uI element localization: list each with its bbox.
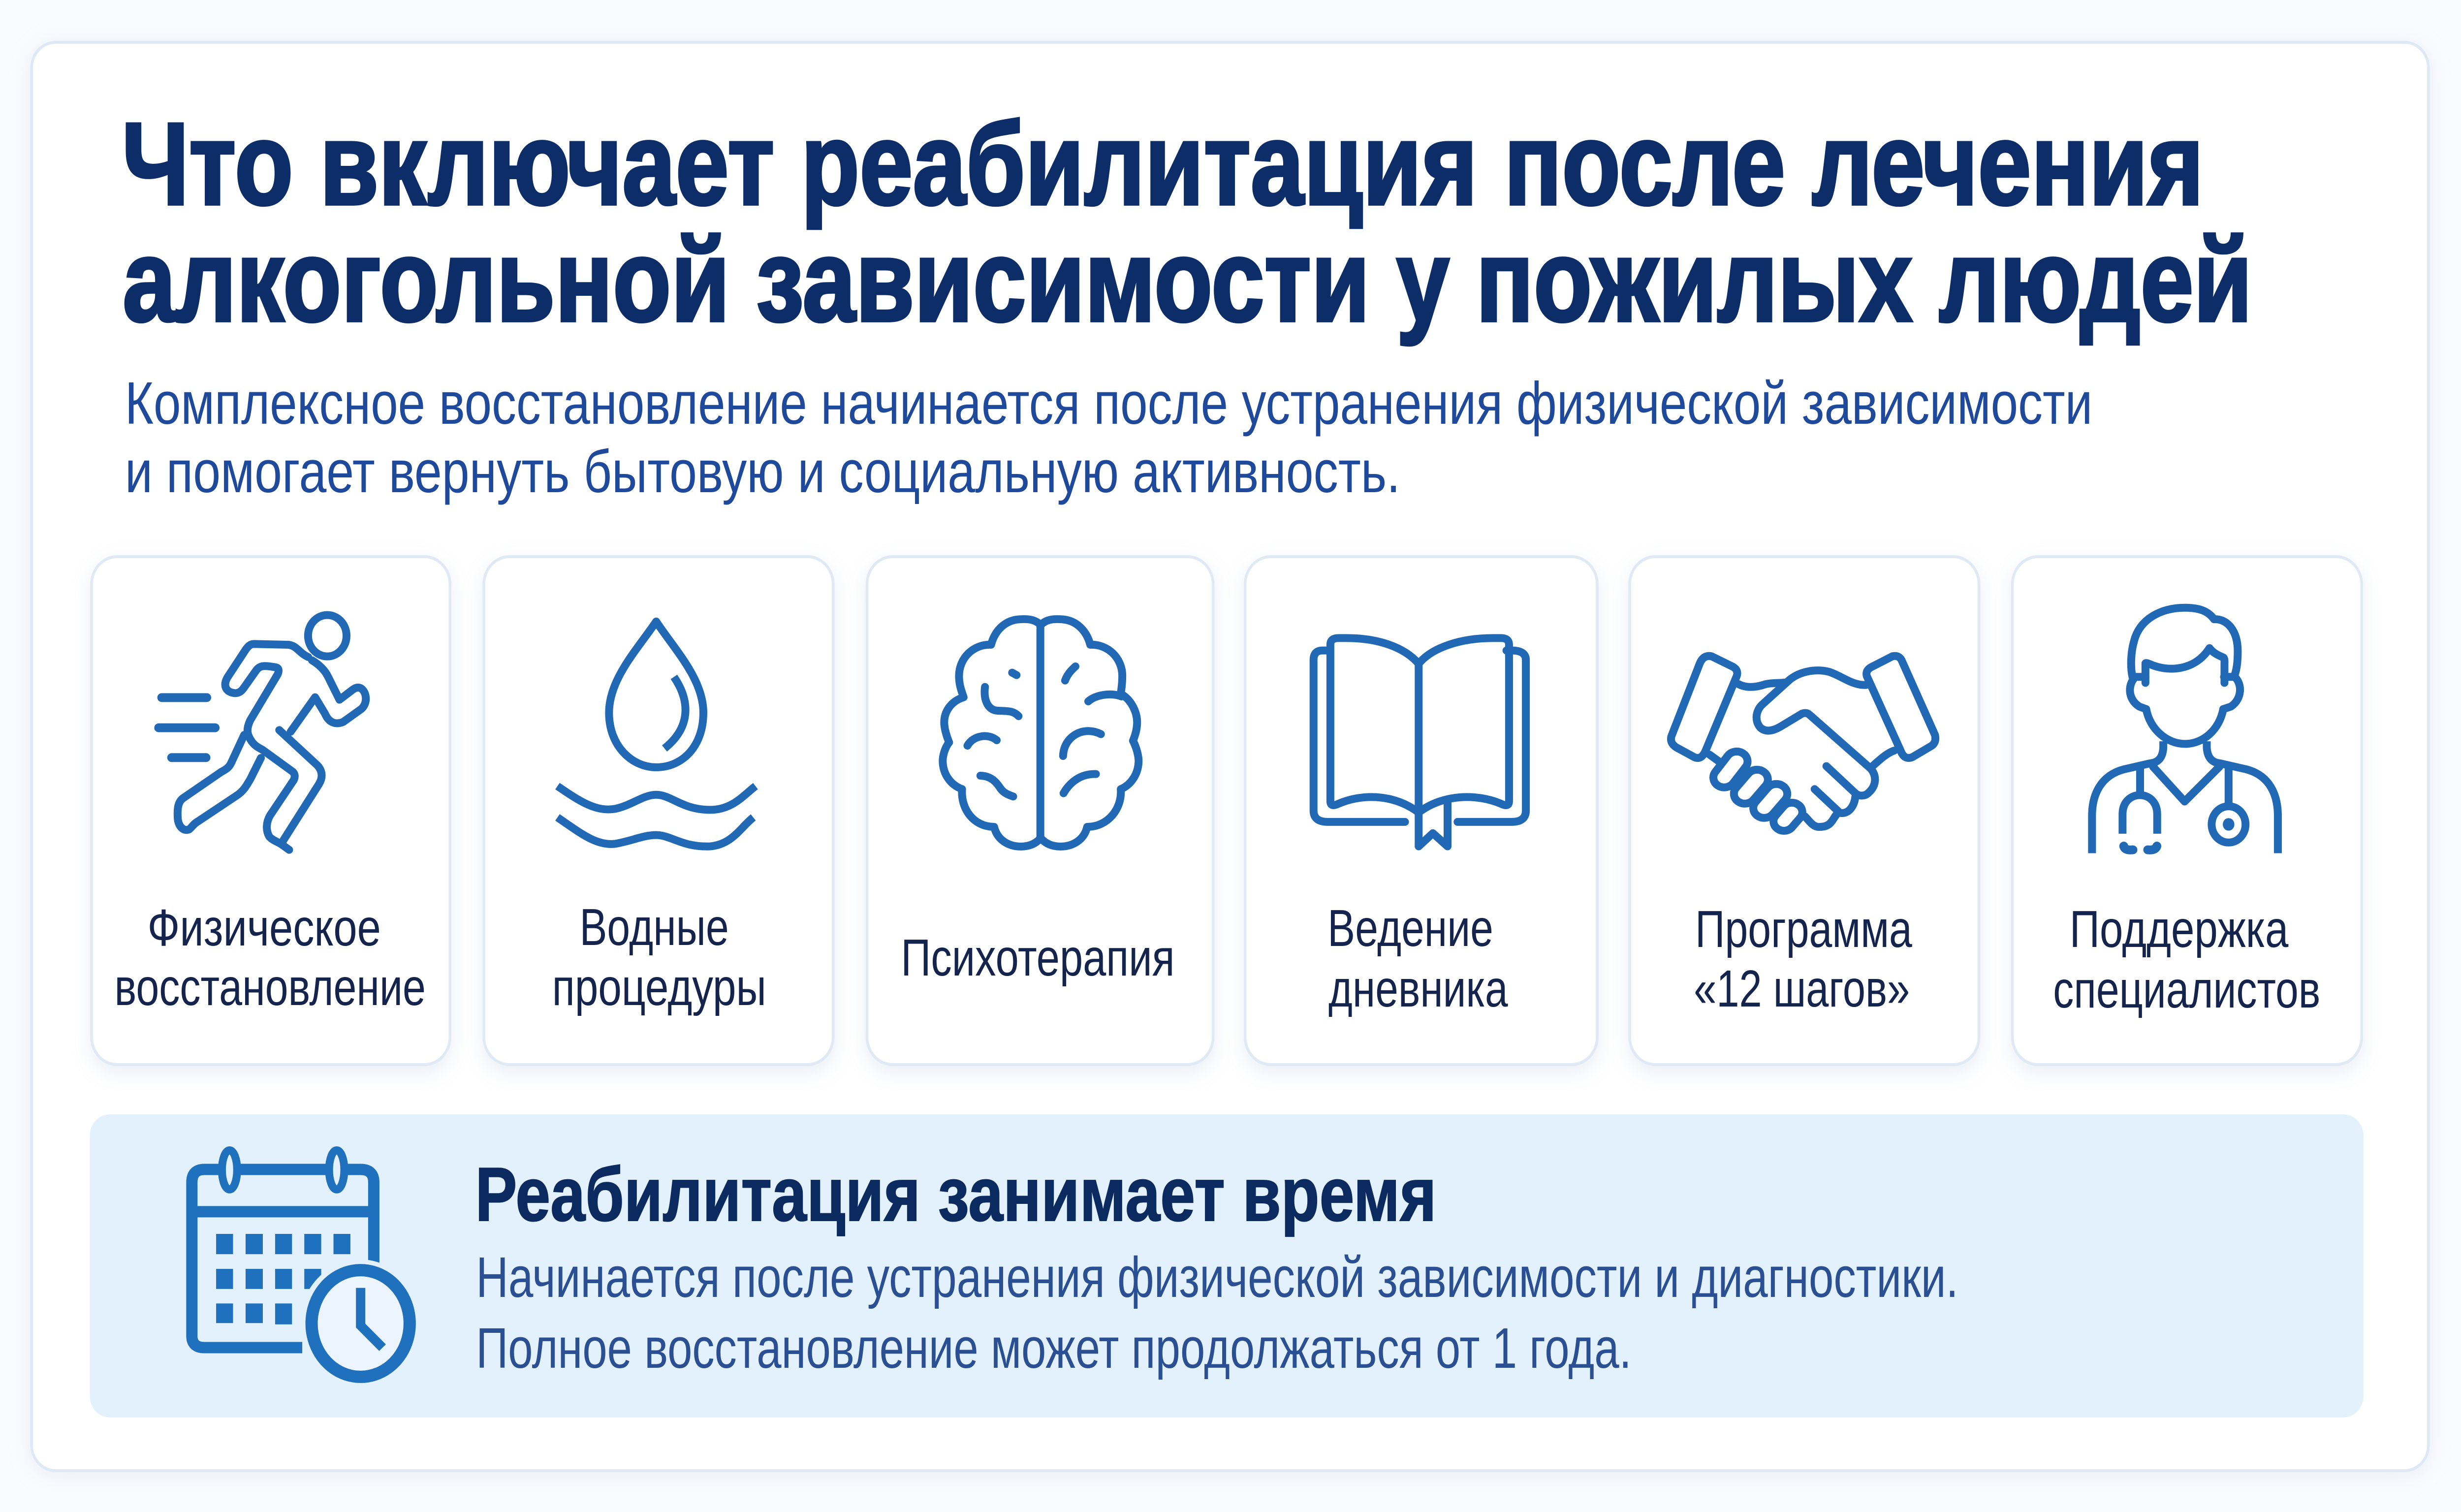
panel: ведение дневника	[1245, 557, 1597, 1065]
title: алкогольной зависимости у пожилых людей	[123, 216, 2252, 346]
panel: поддержка специалистов	[2013, 557, 2362, 1065]
icon: calendar with clock	[192, 1150, 421, 1387]
subtitle: Комплексное восстановление начинается после устранения физической зависимости	[125, 370, 2092, 437]
banner text: Начинается после устранения физической зависимости и диагностики.	[476, 1245, 1958, 1309]
panel: banner	[90, 1114, 2364, 1418]
label	[552, 898, 766, 1016]
label: специалистов	[2053, 960, 2320, 1019]
icon: book	[1314, 638, 1526, 847]
label: Ведение	[1327, 899, 1493, 957]
subtitle: и помогает вернуть бытовую и социальную активность.	[125, 438, 1400, 505]
icon: brain	[943, 619, 1138, 847]
icon: water drop	[558, 622, 756, 847]
label	[1327, 899, 1508, 1018]
panel: физическое восстановление	[92, 557, 450, 1065]
banner text: Полное восстановление может продолжаться от 1 года.	[476, 1316, 1632, 1380]
banner text	[476, 1245, 1958, 1380]
label	[1694, 900, 1912, 1018]
icon: runner	[158, 615, 366, 850]
label: Программа	[1695, 900, 1912, 958]
panel: водные процедуры	[484, 557, 833, 1065]
icon: doctor	[2092, 608, 2278, 853]
label: Водные	[579, 898, 729, 956]
title	[122, 99, 2252, 346]
label: Поддержка	[2070, 900, 2288, 958]
title: Что включает реабилитация после лечения	[122, 99, 2204, 229]
icon: handshake	[1671, 656, 1935, 835]
label	[115, 898, 426, 1016]
label: дневника	[1328, 959, 1508, 1018]
subtitle	[125, 370, 2092, 505]
label	[2053, 900, 2320, 1019]
label: процедуры	[552, 958, 766, 1016]
label: «12 шагов»	[1694, 959, 1910, 1018]
panel: программа 12 шагов	[1630, 557, 1979, 1065]
label: Психотерапия	[901, 928, 1175, 987]
panel: психотерапия	[867, 557, 1213, 1065]
label: Физическое	[147, 898, 381, 957]
label: восстановление	[115, 958, 426, 1016]
banner heading: Реабилитация занимает время	[475, 1152, 1437, 1237]
